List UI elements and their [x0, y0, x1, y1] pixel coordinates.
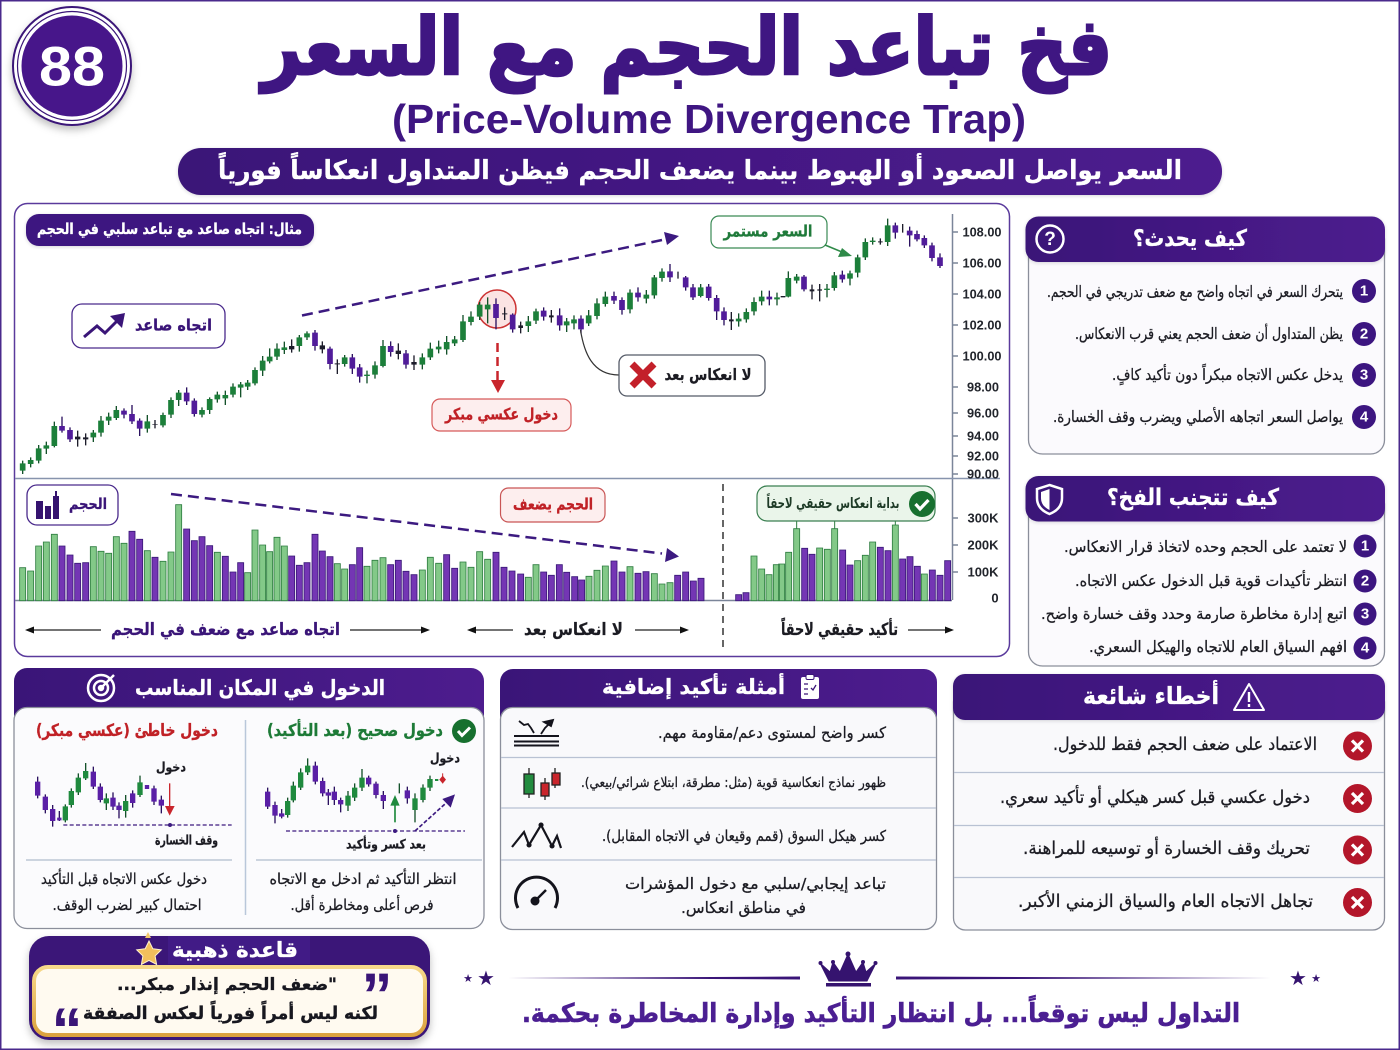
row 4: [516, 875, 886, 918]
icon: clipboard: [801, 674, 819, 699]
mistake 2: [1000, 784, 1372, 813]
mistake 2: دخول عكسي قبل كسر هيكلي أو تأكيد سعري.: [1000, 785, 1310, 808]
wrong entry column: احتمال كبير لضرب الوقف.: [52, 896, 202, 914]
phase label: uptrend with weak volume: اتجاه صاعد مع ضعف في الحجم: [111, 620, 340, 640]
icon: candles: [524, 768, 560, 800]
icon: gold star: [137, 932, 161, 964]
phase label: real confirmation: تأكيد حقيقي لاحقاً: [781, 616, 898, 640]
header: كيف يحدث؟: [1133, 226, 1248, 252]
price axis labels: 0: [991, 590, 999, 606]
correct entry column: دخول صحيح (بعد التأكيد): [267, 719, 443, 741]
callout: golden rule: لكنه ليس أمراً فورياً لعكس الصفقة: [83, 1000, 378, 1024]
header: [1026, 216, 1385, 262]
correct entry column: بعد كسر وتأكيد: [346, 836, 426, 852]
icon: volume bars: [36, 491, 59, 519]
title: فخ تباعد الحجم مع السعر: [258, 3, 1112, 93]
step 4: يواصل السعر اتجاهه الأصلي ويضرب وقف الخسارة.: [1053, 407, 1343, 427]
label: volume: [27, 485, 118, 525]
label: uptrend: اتجاه صاعد: [135, 316, 212, 334]
badge: number 88: 88: [39, 34, 105, 98]
header: الدخول في المكان المناسب: [135, 676, 385, 700]
subtitle: English name: (Price-Volume Divergence Trap): [392, 96, 1026, 142]
mistake 1: [1053, 732, 1372, 760]
label: price continues: السعر مستمر: [723, 222, 812, 240]
label: price continues: [711, 216, 852, 257]
step 2: يظن المتداول أن ضعف الحجم يعني قرب الانعكاس.: [1075, 323, 1343, 344]
closing statement: التداول ليس توقعاً... بل انتظار التأكيد وإدارة المخاطرة بحكمة.: [522, 994, 1240, 1029]
header: أمثلة تأكيد إضافية: [602, 672, 785, 699]
icon: question mark: [1036, 226, 1064, 252]
step 3: 3: [1361, 606, 1369, 622]
definition banner: [178, 148, 1222, 195]
mistake 4: [1018, 888, 1372, 917]
callout: golden rule: "ضعف الحجم إنذار مبكر...: [117, 975, 337, 995]
decoration: stars and crown: ★: [1311, 973, 1321, 985]
step 1: لا تعتمد على الحجم وحده لاتخاذ قرار الانعكاس.: [1064, 538, 1347, 557]
panel: how to avoid the trap: [1026, 476, 1385, 666]
icon: market structure: [512, 825, 561, 848]
panel: common mistakes: [953, 674, 1385, 930]
label: volume: الحجم: [69, 495, 107, 513]
icon: check: [909, 491, 935, 517]
step 2: 2: [1361, 572, 1369, 590]
row 2: ظهور نماذج انعكاسية قوية (مثل: مطرقة، ابتلاع شرائي/بيعي).: [581, 775, 886, 791]
price axis labels: 102.00: [962, 318, 1002, 332]
wrong entry column: دخول عكس الاتجاه قبل التأكيد: [41, 868, 207, 888]
early entry arrow: [491, 343, 505, 393]
label: example pill: مثال: اتجاه صاعد مع تباعد سلبي في الحجم: [37, 220, 302, 238]
icon: red cross: [632, 364, 654, 386]
correct entry column: دخول: [430, 752, 460, 766]
correct entry column: [267, 719, 476, 914]
callout: golden rule: [29, 932, 430, 1050]
decoration: stars and crown: [463, 952, 1321, 990]
wrong entry column: دخول: [156, 760, 186, 776]
price axis labels: 200K: [968, 538, 999, 552]
header: [953, 674, 1385, 720]
label: example pill: [26, 214, 314, 246]
icon: warning triangle: [1234, 684, 1264, 710]
header: [500, 669, 937, 725]
step 4: افهم السياق العام للاتجاه والهيكل السعري.: [1089, 638, 1347, 657]
quote marks: ”: [362, 962, 392, 1030]
price candlesticks: [23, 219, 940, 474]
price axis labels: 94.00: [967, 428, 999, 444]
arrow: [825, 245, 852, 257]
price axis labels: 100.00: [962, 348, 1002, 364]
callout: golden rule: قاعدة ذهبية: [172, 938, 298, 962]
price axis labels: 98.00: [967, 380, 999, 394]
definition banner: السعر يواصل الصعود أو الهبوط بينما يضعف الحجم فيظن المتداول انعكاساً فورياً: [218, 151, 1182, 186]
label: volume weakens: [500, 488, 605, 522]
phase label: uptrend with weak volume: [25, 620, 430, 640]
label: early reverse entry: دخول عكسي مبكر: [444, 404, 558, 424]
price axis labels: 104.00: [962, 286, 1002, 302]
volume bars: [20, 505, 951, 601]
step 3: 3: [1360, 366, 1368, 384]
step 4: 4: [1361, 640, 1370, 656]
label: no reversal yet: [580, 330, 765, 396]
row 4: تباعد إيجابي/سلبي مع دخول المؤشرات: [625, 875, 886, 894]
row 4: في مناطق انعكاس.: [681, 899, 806, 918]
correct entry column: فرص أعلى ومخاطرة أقل.: [290, 895, 434, 914]
axis and grid lines: [15, 214, 1000, 650]
panel: how it happens: [1026, 216, 1385, 454]
icon: breakout: [514, 720, 559, 746]
row 1: كسر واضح لمستوى دعم/مقاومة مهم.: [658, 724, 887, 743]
label: real reversal later: [757, 486, 935, 521]
label: early reverse entry: [432, 399, 571, 431]
price axis labels: 106.00: [962, 256, 1002, 270]
decoration: stars and crown: ★: [477, 968, 495, 990]
early entry highlight circle: [478, 290, 516, 328]
panel: additional confirmation: [500, 669, 937, 930]
icon: question mark: ?: [1044, 229, 1056, 250]
header: كيف تتجنب الفخ؟: [1107, 485, 1280, 511]
header: [1026, 476, 1385, 522]
step 3: يدخل عكس الاتجاه مبكراً دون تأكيد كافٍ.: [1112, 364, 1343, 386]
row 3: [512, 825, 887, 848]
icon: shield: [1037, 485, 1062, 514]
row 3: كسر هيكل السوق (قمم وقيعان في الاتجاه المقابل).: [602, 827, 887, 846]
label: volume weakens: الحجم يضعف: [513, 494, 593, 514]
label: uptrend: [72, 304, 225, 348]
price axis labels: 90.00: [967, 466, 999, 482]
price axis labels: 300K: [968, 510, 999, 526]
step 2: 2: [1360, 326, 1368, 342]
label: no reversal yet: لا انعكاس بعد: [664, 365, 752, 384]
mini chart: wrong entry: [38, 763, 232, 827]
step 1: 1: [1360, 282, 1368, 300]
wrong entry column: وقف الخسارة: [155, 834, 218, 848]
panel: chart: [14, 204, 1010, 656]
row 2: [524, 768, 886, 800]
icon: check: [452, 719, 476, 743]
dashed arrow: rising price: [302, 232, 679, 316]
step 4: 4: [1360, 408, 1369, 426]
mistake 4: تجاهل الاتجاه العام والسياق الزمني الأكبر.: [1018, 890, 1313, 912]
dashed arrow: falling volume: [171, 494, 679, 562]
icon: target: [88, 675, 114, 701]
phase label: no reversal: [467, 620, 689, 640]
icon: gauge: [516, 877, 558, 908]
mini chart: correct entry: [268, 758, 465, 833]
decoration: stars and crown: ★: [1289, 968, 1307, 990]
mistake 1: الاعتماد على ضعف الحجم فقط للدخول.: [1053, 735, 1317, 755]
label: real reversal later: بداية انعكاس حقيقي لاحقاً: [766, 493, 900, 512]
step 1: 1: [1361, 538, 1369, 554]
header: أخطاء شائعة: [1083, 680, 1219, 710]
price axis labels: 108.00: [962, 224, 1002, 240]
step 3: اتبع إدارة مخاطرة صارمة وحدد وقف خسارة واضح.: [1041, 605, 1347, 624]
icon: rising arrow: [84, 313, 125, 337]
price axis labels: [962, 224, 1002, 606]
badge: number 88: [13, 7, 131, 125]
panel: entry in the right place: [14, 668, 484, 928]
price axis labels: 96.00: [967, 406, 999, 420]
mistake 3: [1023, 836, 1372, 864]
step 2: انتظر تأكيدات قوية قبل الدخول عكس الاتجاه.: [1075, 570, 1347, 590]
wrong entry column: [36, 721, 232, 914]
row 1: [514, 720, 887, 746]
header: [14, 668, 484, 725]
price axis labels: 92.00: [967, 448, 999, 464]
decoration: stars and crown: ★: [463, 973, 473, 985]
mistake 3: تحريك وقف الخسارة أو توسيعه للمراهنة.: [1023, 836, 1310, 859]
wrong entry column: دخول خاطئ (عكسي مبكر): [36, 721, 218, 741]
correct entry column: انتظر التأكيد ثم ادخل مع الاتجاه: [270, 868, 456, 888]
price axis labels: 100K: [968, 564, 999, 580]
phase label: no reversal: لا انعكاس بعد: [524, 620, 623, 640]
